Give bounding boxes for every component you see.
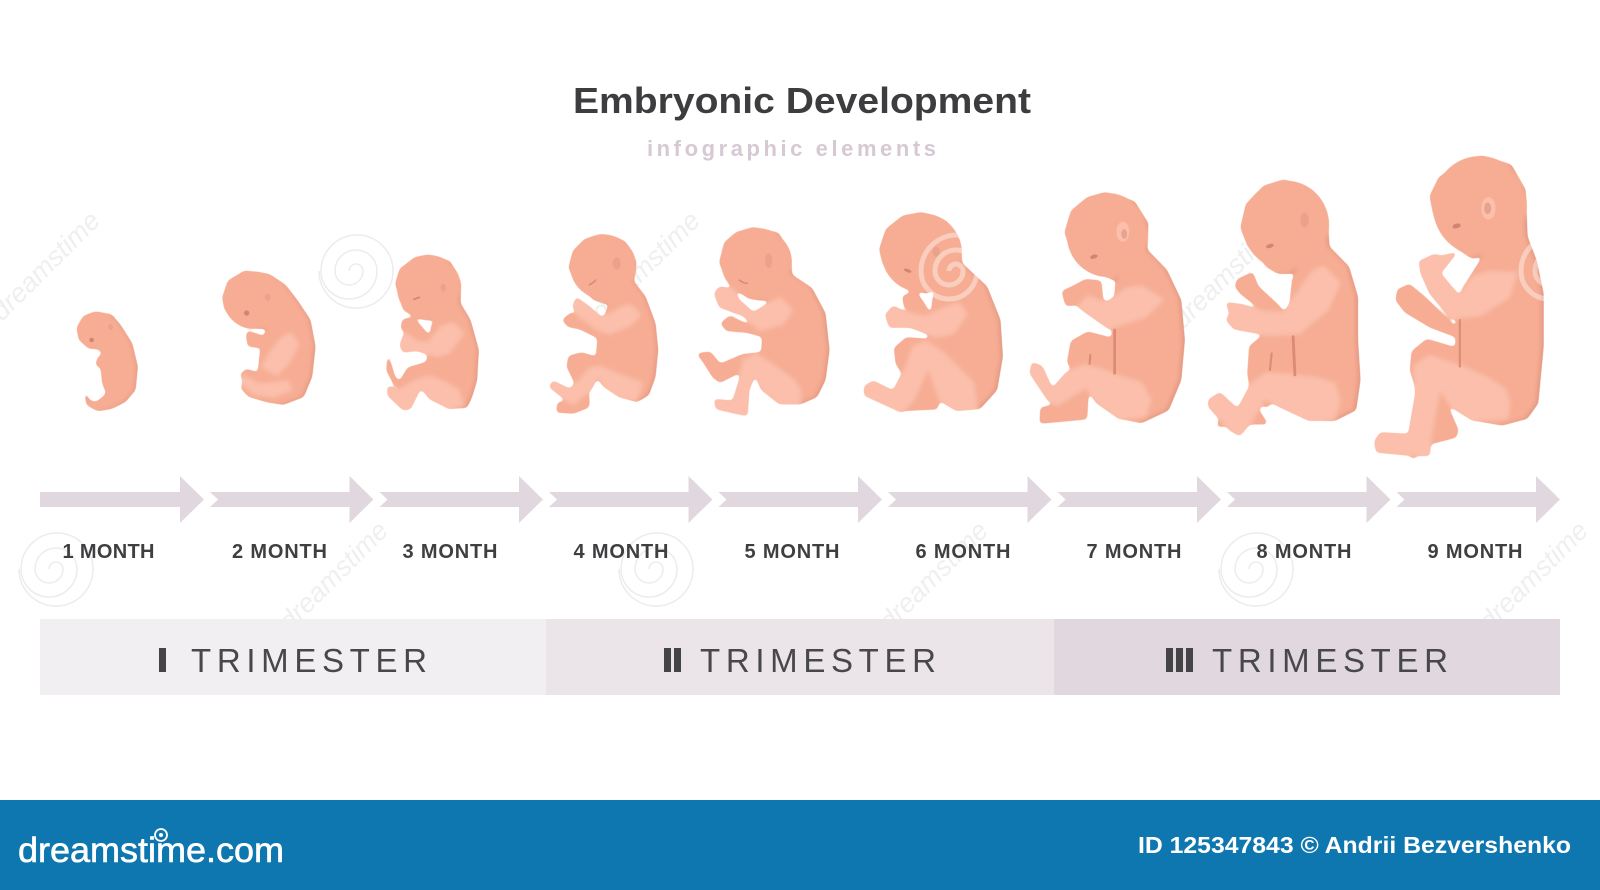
fetus: 6 month <box>865 213 1002 412</box>
month labels: 2 MONTH <box>232 541 327 563</box>
month labels: 8 MONTH <box>1256 541 1352 563</box>
fetus: 5 month <box>698 228 829 415</box>
spiral watermarks over fetuses <box>921 235 1593 299</box>
fetus: 2 month <box>223 271 315 404</box>
footer logo: dreamstime.com <box>18 831 284 870</box>
fetus: 1 month <box>77 312 137 411</box>
panel: third trimester: TRIMESTER <box>1212 642 1448 679</box>
panel: second trimester: TRIMESTER <box>700 642 936 679</box>
month labels: 4 MONTH <box>574 541 668 563</box>
month labels: 7 MONTH <box>1086 541 1182 563</box>
month labels: 3 MONTH <box>402 541 498 563</box>
panel: second trimester <box>546 619 1054 695</box>
fetus: 4 month <box>550 234 658 413</box>
panel: first trimester: TRIMESTER <box>191 642 427 679</box>
fetus: 7 month <box>1031 193 1184 423</box>
watermark background: dreamstime <box>1166 213 1287 334</box>
watermark background: dreamstime <box>585 205 706 326</box>
title: Embryonic Development <box>573 80 1031 121</box>
panel: first trimester <box>40 619 546 695</box>
month labels: 1 MONTH <box>62 541 154 563</box>
month labels: 6 MONTH <box>916 541 1010 563</box>
footer credit: ID 125347843 © Andrii Bezvershenko <box>1138 832 1571 858</box>
watermark background: dreamstime <box>873 515 994 636</box>
fetus: 9 month <box>1375 156 1543 458</box>
fetus: 8 month <box>1209 180 1360 435</box>
month labels: 5 MONTH <box>744 541 840 563</box>
watermark background: dreamstime <box>1473 515 1594 636</box>
subtitle: infographic elements <box>647 136 936 161</box>
footer bar <box>0 800 1600 890</box>
panel: third trimester <box>1054 619 1560 695</box>
watermark background: dreamstime <box>273 515 394 636</box>
timeline arrows <box>40 476 1560 523</box>
watermark background <box>0 205 1594 636</box>
month labels <box>62 541 1522 563</box>
month labels: 9 MONTH <box>1428 541 1522 563</box>
fetus: 3 month <box>387 255 478 409</box>
